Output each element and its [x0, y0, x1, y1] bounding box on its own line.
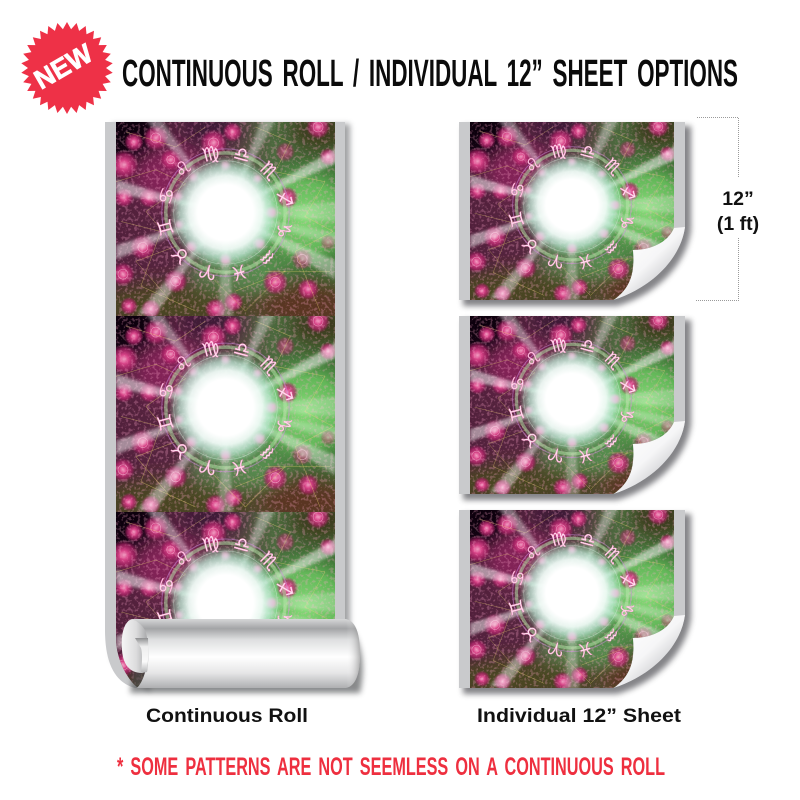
paper shadow	[112, 124, 350, 692]
panel: sheet 3: ♎♏♐♑♒♓♈♉♊♋♌♍	[506, 528, 638, 660]
rolled cylinder	[132, 619, 360, 688]
panel: sheet 1	[458, 122, 696, 310]
dimension label: (1 ft)	[717, 213, 759, 235]
pattern tiles: ♎♏♐♑♒♓♈♉♊♋♌♍	[153, 141, 297, 285]
badge: new: NEW	[29, 38, 98, 95]
rolled cylinder shadow	[130, 630, 363, 693]
label: individual sheet: Individual 12” Sheet	[477, 706, 682, 727]
pattern tiles	[116, 122, 335, 687]
panel: sheet 2: ♎♏♐♑♒♓♈♉♊♋♌♍	[506, 334, 638, 466]
dimension bracket	[695, 118, 738, 300]
roll paper	[105, 122, 345, 688]
roll opening	[122, 619, 148, 673]
pattern tiles: ♎♏♐♑♒♓♈♉♊♋♌♍	[153, 336, 297, 480]
label: continuous roll: Continuous Roll	[146, 706, 308, 727]
panel: sheet 2	[458, 316, 696, 504]
dimension label: 12”	[722, 188, 754, 210]
dimension label	[717, 188, 759, 235]
badge: new	[21, 22, 113, 114]
panel: sheet 3	[458, 510, 696, 698]
pattern tiles: ♎♏♐♑♒♓♈♉♊♋♌♍	[153, 531, 297, 675]
roll inner notch	[135, 638, 148, 672]
panel: sheet 1: ♎♏♐♑♒♓♈♉♊♋♌♍	[506, 140, 638, 272]
panel: continuous roll	[105, 120, 366, 697]
